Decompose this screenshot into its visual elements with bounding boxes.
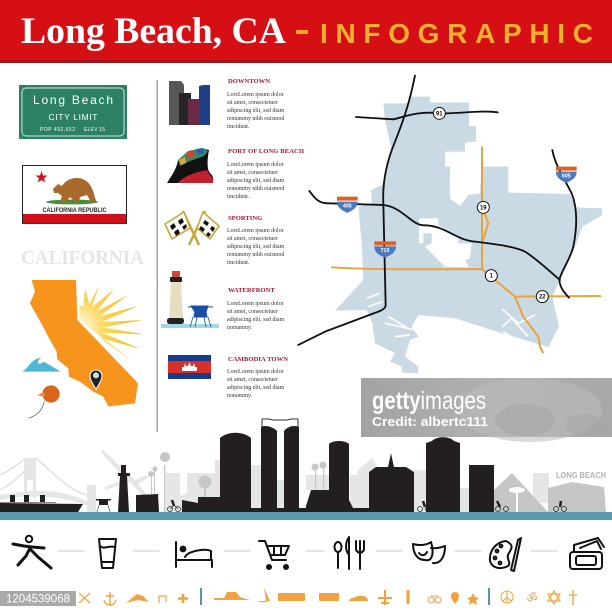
watermark logo: gettyimages [372, 387, 486, 415]
text block: sit amet, consectetuer [227, 377, 278, 383]
icon: crossed utensils [79, 593, 90, 603]
icon: bicycle [428, 596, 441, 603]
watermark credit: Credit: albertc111 [372, 414, 488, 429]
text block: tincidunt. [227, 124, 250, 130]
heading: WATERFRONT [228, 287, 275, 294]
California map with sun, wave, poppy [22, 280, 144, 418]
text block: adipiscing elit, sed diam [227, 108, 285, 114]
shield 605: 605 [562, 173, 571, 179]
city limit road sign: POP 492,652 [40, 127, 75, 133]
icon: cruise ship [167, 148, 213, 183]
icon: cutlery [334, 537, 364, 569]
row of black category icons [13, 536, 604, 571]
image number tag: 1204539068 [6, 592, 70, 606]
California flag: CALIFORNIA REPUBLIC [42, 207, 107, 214]
shield 710 [374, 241, 396, 258]
connector lines [58, 550, 557, 552]
grey palms and Long Beach sign [148, 452, 606, 512]
California heading: CALIFORNIA [21, 247, 145, 269]
icon: theatre masks [413, 542, 445, 563]
icon: trolley [278, 593, 305, 601]
icon: lunging figure [13, 536, 51, 568]
icon: star of David [548, 591, 560, 604]
palm in front of pyramid [509, 487, 525, 512]
skyline [0, 419, 612, 520]
panel: Cambodia town [168, 355, 288, 399]
grey palms and Long Beach sign: LONG BEACH [556, 471, 606, 480]
separator [200, 588, 202, 605]
bridge frame between towers [262, 419, 298, 428]
interstate shields [337, 167, 577, 258]
black freeways [298, 76, 576, 345]
icon: beer glass [99, 539, 116, 568]
text block: sit amet, consectetuer [227, 170, 278, 176]
heading: DOWNTOWN [228, 78, 270, 85]
title: Long Beach, CA [21, 11, 286, 52]
panel: port of Long Beach [167, 148, 305, 200]
shield 605 [556, 167, 577, 183]
text block [227, 301, 285, 331]
watermark panel [361, 378, 612, 442]
column divider [156, 80, 158, 432]
icon: anchor [104, 592, 116, 605]
orange state routes [331, 147, 601, 353]
cyclists [168, 500, 566, 512]
icon: map pin [451, 592, 459, 604]
ship [0, 495, 83, 512]
lifeguard tower [96, 499, 111, 512]
panel: downtown [169, 78, 285, 130]
separator [488, 588, 490, 605]
icon: star [467, 593, 479, 605]
icon: sun [79, 286, 144, 361]
icon: wave surfer [126, 594, 149, 603]
icon: Cambodia flag [168, 355, 211, 379]
marker 91: 91 [436, 111, 443, 117]
icon: checkered flags [165, 211, 219, 245]
text block [227, 369, 285, 399]
shield 710: 710 [381, 248, 389, 254]
text block: adipiscing elit, sed diam [227, 385, 285, 391]
marker 22 [536, 291, 548, 303]
text block: nonummy nibh euismod [227, 186, 284, 192]
panel: waterfront [161, 271, 285, 331]
icon: lighthouse and lifeguard tower [161, 271, 219, 328]
black buildings [136, 426, 494, 512]
icon: downtown buildings [169, 81, 210, 125]
text block: sit amet, consectetuer [227, 309, 278, 315]
icon: bus [319, 593, 339, 601]
title dash [296, 30, 308, 34]
marker 1: 1 [490, 274, 494, 280]
marker 19 [477, 201, 489, 213]
icon: location pin [90, 370, 102, 389]
background landmarks [0, 450, 549, 512]
icon: airplane [378, 590, 392, 605]
icon: palm tree [406, 590, 410, 604]
icon: crescent [590, 591, 596, 603]
marker 22: 22 [539, 295, 546, 301]
icon: shopping cart [259, 541, 289, 569]
city limit road sign: CITY LIMIT [48, 112, 98, 122]
city limit road sign: Long Beach [33, 93, 113, 107]
state shape [30, 280, 138, 406]
text block: nonummy nibh euismod [227, 116, 284, 122]
marker 19: 19 [480, 205, 487, 211]
icon: sailboat [258, 588, 270, 602]
text block: nonummy. [227, 325, 253, 331]
shield 405: 405 [343, 203, 352, 209]
heading: PORT OF LONG BEACH [228, 148, 305, 155]
icon: cross [569, 590, 577, 605]
text block: LoreLorem ipsum dolor [227, 92, 284, 98]
icon: tickets [570, 538, 604, 569]
icon: peace sign [501, 591, 513, 603]
shield 405 [337, 197, 358, 213]
text block: tincidunt. [227, 260, 250, 266]
icon: car [349, 596, 368, 601]
text block: sit amet, consectetuer [227, 100, 278, 106]
city area [335, 97, 602, 373]
text block [227, 92, 285, 130]
icon: om: ॐ [527, 591, 538, 605]
text block: nonummy. [227, 393, 253, 399]
city limit road sign: ELEV 15 [84, 127, 105, 133]
text block [227, 228, 285, 266]
icon: poppy [28, 385, 60, 418]
marker 1 [485, 270, 497, 282]
text block: LoreLorem ipsum dolor [227, 228, 284, 234]
state route markers [433, 107, 548, 303]
California flag [22, 166, 126, 224]
text block: adipiscing elit, sed diam [227, 317, 285, 323]
text block: sit amet, consectetuer [227, 236, 278, 242]
header banner [0, 0, 612, 63]
text block: LoreLorem ipsum dolor [227, 301, 284, 307]
text block: nonummy nibh euismod [227, 252, 284, 258]
icon: medical cross [178, 594, 188, 603]
lighthouse [118, 465, 130, 512]
text block: adipiscing elit, sed diam [227, 244, 285, 250]
icon: palette and brush [490, 538, 521, 571]
text block: LoreLorem ipsum dolor [227, 369, 284, 375]
text block: adipiscing elit, sed diam [227, 178, 285, 184]
text block [227, 162, 285, 200]
text block: LoreLorem ipsum dolor [227, 162, 284, 168]
marker 91 [433, 107, 445, 119]
bear [46, 178, 98, 204]
icon: bed [176, 542, 212, 567]
city limit road sign [19, 85, 127, 139]
icon: music note [159, 596, 166, 603]
city road map [298, 76, 602, 373]
row of small orange icons [79, 588, 596, 605]
heading: SPORTING [228, 215, 262, 222]
subtitle: INFOGRAPHIC [320, 18, 593, 49]
panel: sporting [165, 211, 285, 266]
icon: ferry [214, 592, 250, 600]
water band [0, 512, 612, 520]
icon: wave [22, 357, 61, 372]
heading: CAMBODIA TOWN [228, 356, 288, 363]
text block: tincidunt. [227, 194, 250, 200]
